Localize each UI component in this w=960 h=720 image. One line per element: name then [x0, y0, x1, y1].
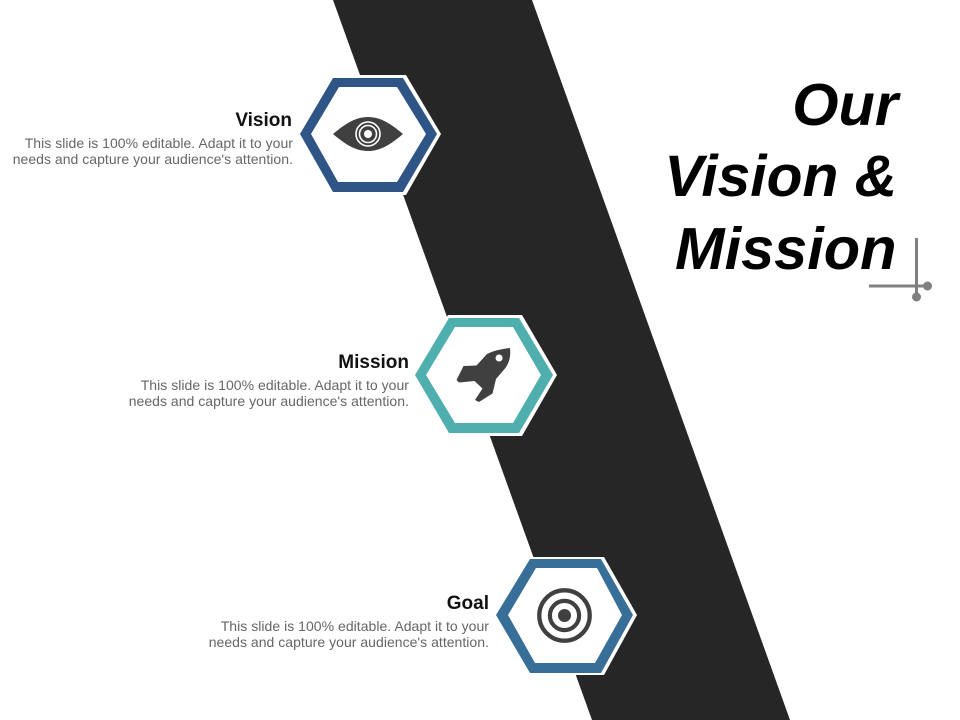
title: Our: [792, 71, 898, 138]
icon: eye: [333, 117, 403, 151]
text block: goal: needs and capture your audience's attention.: [209, 634, 489, 650]
text block: vision: needs and capture your audience's attention.: [13, 151, 293, 167]
text block: goal: Goal: [447, 593, 489, 614]
crosshair decoration: [869, 238, 932, 302]
title: Mission: [675, 215, 896, 282]
text block: mission: This slide is 100% editable. Adapt it to your: [141, 377, 409, 393]
text block: vision: This slide is 100% editable. Adapt it to your: [25, 135, 293, 151]
title: Vision &: [664, 144, 897, 209]
hexagon: goal: [494, 557, 637, 675]
text block: mission: [129, 352, 409, 409]
text block: goal: [209, 593, 489, 650]
title: [664, 71, 901, 282]
hexagon: mission: [413, 315, 557, 436]
text block: vision: [13, 110, 293, 167]
hexagon: vision: [297, 75, 441, 195]
diagonal dark band: [333, 0, 790, 720]
text block: vision: Vision: [235, 110, 292, 131]
text block: mission: Mission: [338, 352, 409, 373]
icon: target: [539, 590, 590, 641]
icon: rocket: [456, 348, 510, 402]
text block: goal: This slide is 100% editable. Adapt it to your: [221, 618, 489, 634]
text block: mission: needs and capture your audience's attention.: [129, 393, 409, 409]
